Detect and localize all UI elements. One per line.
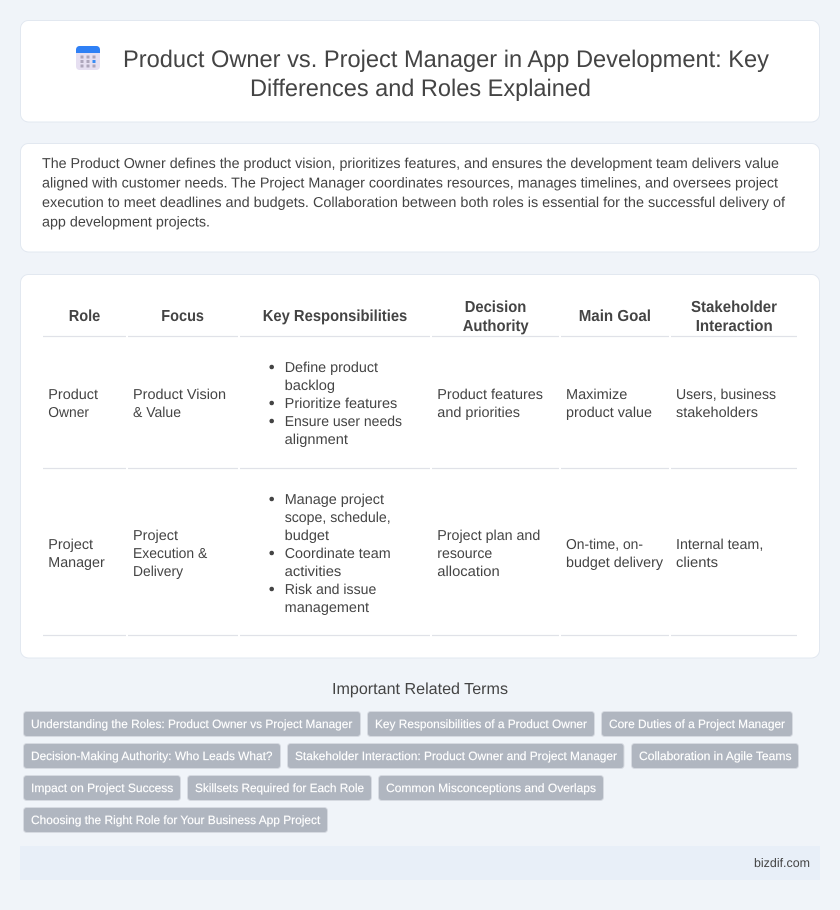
table header row: Authority [463,318,529,335]
table row: Product Owner: alignment [285,432,348,448]
intro text: aligned with customer needs. The Project Manager coordinates resources, manages timelines, and oversees project [42,176,778,192]
table row: Product Owner: Define product [285,360,378,376]
title: Product Owner vs. Project Manager in App Development: Key [123,46,769,73]
intro text [42,156,786,230]
table row: Project Manager: Execution & [133,546,208,562]
intro text: app development projects. [42,214,210,230]
table row: Project Manager: allocation [437,564,500,580]
tag: understanding the roles [24,712,360,736]
table row: Product Owner [43,360,797,468]
title: Differences and Roles Explained [250,75,591,102]
table row: Product Owner: Owner [48,405,89,421]
tag: agile collaboration: Collaboration in Agile Teams [639,749,792,763]
table row: Project Manager: management [285,600,369,616]
table row: Product Owner: Product [48,387,98,403]
tag: stakeholder interaction [288,744,624,768]
table row: Project Manager: activities [285,564,341,580]
tag: product owner responsibilities [368,712,594,736]
panel: title header [20,20,820,122]
related term tags [24,712,798,832]
table row: Project Manager: Coordinate team [285,546,391,562]
title [123,46,769,102]
panel: comparison table [20,274,820,658]
table header row [43,299,797,336]
table row: Project Manager: clients [676,555,718,571]
table row: Project Manager: Project plan and [437,528,540,544]
tag: skillsets: Skillsets Required for Each Role [195,781,364,795]
table row: Product Owner: Prioritize features [285,396,397,412]
tag: decision-making authority [24,744,280,768]
table row: Project Manager: Risk and issue [285,582,376,598]
table row: Project Manager: Delivery [133,564,184,580]
tag: choosing the right role [24,808,328,832]
table row: Project Manager: budget [285,528,329,544]
table header row: Decision [465,299,526,316]
tag: project success [24,776,180,800]
tag: skillsets [188,776,372,800]
table row: Project Manager: Manage project [285,492,384,508]
tag: product owner responsibilities: Key Responsibilities of a Product Owner [375,717,587,731]
table header row: Focus [161,308,204,325]
table row: Product Owner: Product features [437,387,543,403]
tag: misconceptions [378,776,604,800]
table row: Project Manager: Project [133,528,178,544]
intro text: execution to meet deadlines and budgets. Collaboration between both roles is essential for the successful delivery of [42,195,786,211]
table row: Project Manager: Internal team, [676,537,763,553]
table row: Project Manager: scope, schedule, [285,510,391,526]
tag: choosing the right role: Choosing the Right Role for Your Business App Project [31,813,321,827]
table row: Product Owner: & Value [133,405,181,421]
table row: Product Owner: Ensure user needs [285,414,402,430]
table row: Product Owner: product value [566,405,652,421]
table row: Product Owner: and priorities [437,405,520,421]
tag: project manager duties [602,712,792,736]
table row: Project Manager: On-time, on- [566,537,643,553]
tag: project success: Impact on Project Success [31,781,173,795]
tag: agile collaboration [632,744,798,768]
panel: introduction [20,144,820,252]
intro text: The Product Owner defines the product vision, prioritizes features, and ensures the development team delivers value [42,156,779,172]
footer [20,846,820,880]
table header row: Interaction [696,318,773,335]
table row: Product Owner: stakeholders [676,405,758,421]
tag: project manager duties: Core Duties of a Project Manager [609,717,785,731]
heading: important related terms: Important Related Terms [332,681,508,698]
tag: understanding the roles: Understanding the Roles: Product Owner vs Project Manager [31,717,352,731]
table row: Product Owner: backlog [285,378,335,394]
table row: Project Manager: resource [437,546,492,562]
table header row: Role [69,308,100,325]
tag: decision-making authority: Decision-Making Authority: Who Leads What? [31,749,273,763]
table row: Project Manager: Project [48,537,93,553]
table header row: Key Responsibilities [263,308,407,325]
tag: stakeholder interaction: Stakeholder Interaction: Product Owner and Project Manager [295,749,617,763]
table row: Project Manager: Manager [48,555,105,571]
table row: Product Owner: Users, business [676,387,776,403]
table header row: Stakeholder [691,299,777,316]
table row: Product Owner: Product Vision [133,387,226,403]
table row: Product Owner: Maximize [566,387,627,403]
icon: calendar [76,46,100,70]
table row: Project Manager: budget delivery [566,555,664,571]
footer: bizdif.com [754,856,810,870]
table header row: Main Goal [579,308,651,325]
tag: misconceptions: Common Misconceptions and Overlaps [386,781,596,795]
table row: Project Manager [43,492,797,636]
